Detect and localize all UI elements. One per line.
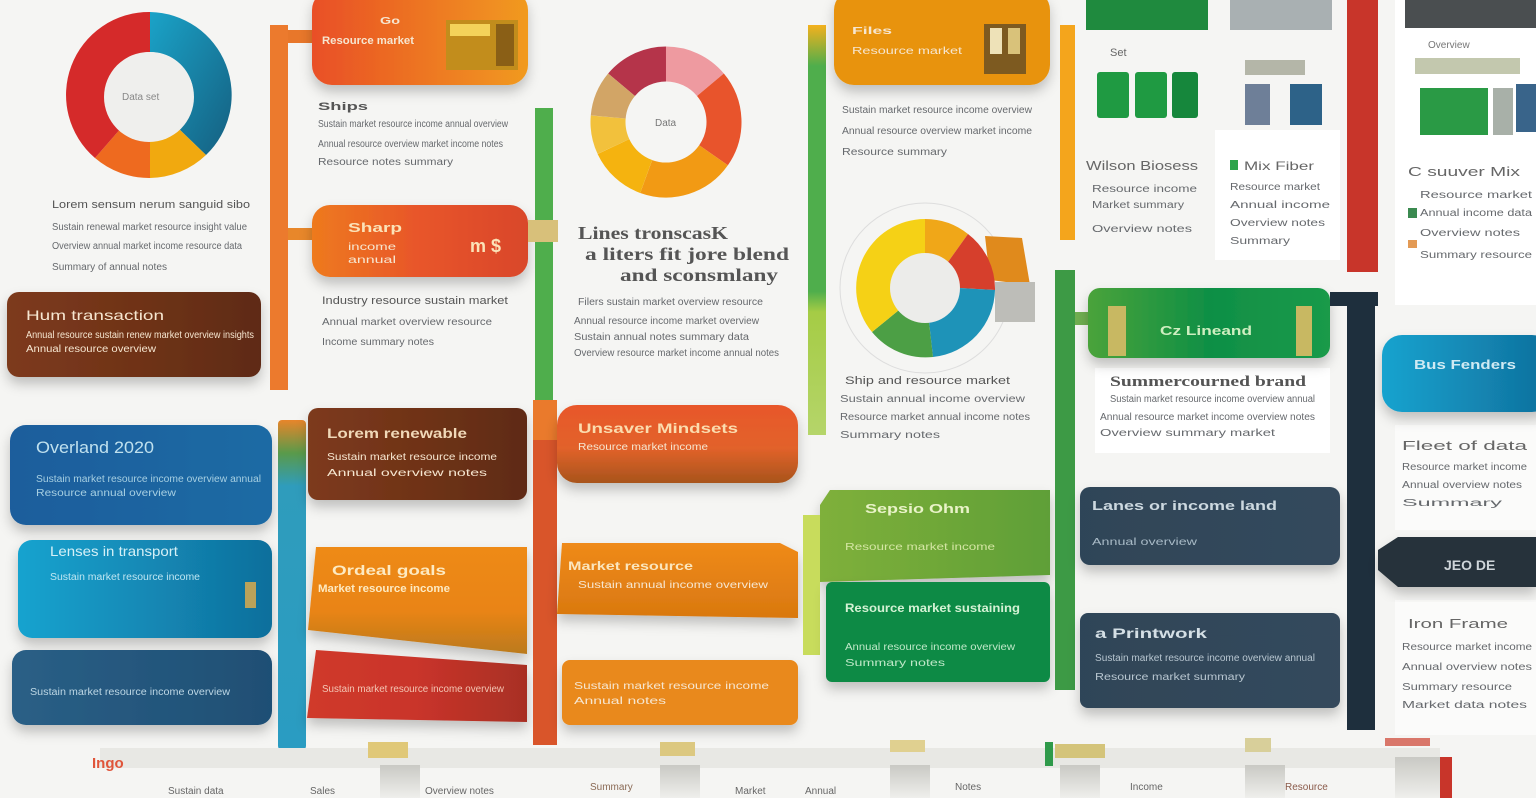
- panel: brown banner: [7, 292, 261, 377]
- text block: upper right left column: Resource income: [1092, 184, 1198, 195]
- heading: center: [578, 223, 789, 285]
- panel: orange red banner: m $: [470, 236, 501, 256]
- text block: right lower: Summary resource: [1402, 682, 1513, 693]
- text block: mid: Annual market overview resource: [322, 317, 492, 328]
- icon: green and blue tiles right: [1420, 84, 1536, 135]
- text block: right lower: Market data notes: [1402, 700, 1527, 711]
- panel: dark blue banner: Sustain market resource income overview: [30, 687, 231, 698]
- panel: brown box: Sustain market resource income: [327, 452, 498, 463]
- text block: upper right-center: [842, 105, 1033, 158]
- panel: orange slanted box: Market resource income: [318, 583, 450, 595]
- panel: orange banner: Resource market income: [578, 442, 709, 453]
- panel: blue banner: [10, 425, 272, 525]
- timeline: bottom strip: Ingo: [92, 755, 124, 772]
- text block: upper right second column: Overview notes: [1230, 218, 1325, 229]
- panel: blue banner: Overland 2020: [36, 438, 154, 457]
- text block: upper right second column: Resource market: [1230, 182, 1320, 193]
- panel: brown banner: Hum transaction: [26, 307, 164, 323]
- text block: right donut caption: Resource market annual income notes: [840, 412, 1030, 423]
- text block: mid: Income summary notes: [322, 337, 434, 348]
- icon: gold box: [446, 20, 518, 70]
- text block: right donut caption: [840, 375, 1030, 441]
- panel: top dark strip: [1405, 0, 1536, 28]
- panel: brown box: Lorem renewable: [327, 425, 467, 441]
- panel: orange header with gold box: [312, 0, 528, 85]
- panel: dark box lower: [1080, 613, 1340, 708]
- panel: dark box upper: [1080, 487, 1340, 565]
- text block: right lower: Annual overview notes: [1402, 662, 1532, 673]
- timeline: bottom strip: Income: [1130, 782, 1163, 793]
- panel: brown banner: Annual resource overview: [26, 344, 157, 355]
- panel: dark box lower: Resource market summary: [1095, 672, 1245, 683]
- heading: center: Lines tronscasK: [578, 223, 728, 243]
- panel: brown box: [308, 408, 527, 500]
- panel: blue banner right: Bus Fenders: [1414, 357, 1516, 372]
- panel: lime box: [820, 490, 1050, 582]
- text block: upper right second column: [1230, 159, 1331, 247]
- panel: dark blue banner: [12, 650, 272, 725]
- text block: center: Overview resource market income annual notes: [574, 348, 779, 359]
- text block: center: Sustain annual notes summary data: [574, 332, 749, 343]
- vertical bar: green right: [1055, 270, 1090, 690]
- text block: right list: C suuver Mix: [1408, 164, 1521, 179]
- panel: orange header right: Resource market: [852, 46, 962, 57]
- text block: right donut caption: Ship and resource market: [845, 375, 1010, 387]
- text block: right mid: Annual overview notes: [1402, 480, 1522, 491]
- text block: upper middle: Sustain market resource income annual overview: [318, 119, 509, 130]
- panel: orange header with gold box: Go: [380, 16, 400, 27]
- donut chart: left: Data set: [122, 92, 159, 103]
- text block: mid: Industry resource sustain market: [322, 295, 508, 307]
- panel: orange red banner: annual: [348, 255, 396, 266]
- panel: red box: [307, 650, 527, 722]
- timeline: bottom strip: Notes: [955, 782, 981, 793]
- text block: right list: Overview notes: [1420, 228, 1520, 239]
- panel: top green strip: [1086, 0, 1208, 30]
- heading: center: a liters fit jore blend: [585, 244, 789, 264]
- panel: dark tag right: JEO DE: [1444, 557, 1495, 573]
- panel: top grey strip: [1230, 0, 1332, 30]
- panel: lime box: Sepsio Ohm: [865, 501, 970, 516]
- panel: green box: Summary notes: [845, 658, 945, 669]
- timeline: bottom strip: Market: [735, 786, 766, 797]
- text block: left donut caption: Summary of annual notes: [52, 262, 167, 273]
- panel: red box: Sustain market resource income overview: [322, 684, 505, 695]
- text block: top right label: Overview: [1428, 40, 1470, 51]
- text block: center: Annual resource income market overview: [574, 316, 760, 327]
- text block: right lower: [1402, 616, 1533, 711]
- panel: orange header right: [834, 0, 1050, 85]
- panel: dark tag right: [1378, 537, 1536, 587]
- panel: orange slanted box: [308, 547, 527, 654]
- text block: left donut caption: Lorem sensum nerum sanguid sibo: [52, 199, 250, 211]
- text block: left donut caption: [52, 199, 250, 273]
- text block: upper middle: [318, 101, 509, 168]
- icon: tall box: [984, 24, 1026, 74]
- text block: right lower: Iron Frame: [1408, 616, 1508, 631]
- panel: orange header with gold box: Resource market: [322, 35, 414, 47]
- panel: green banner: [1088, 288, 1330, 358]
- vertical bar: green to lime: [808, 25, 826, 435]
- panel: cyan banner: Lenses in transport: [50, 543, 178, 559]
- text block: right list: Resource market: [1420, 190, 1532, 201]
- timeline: bottom strip: [92, 738, 1452, 798]
- text block: upper middle: Annual resource overview market income notes: [318, 139, 503, 150]
- panel: orange box middle: Market resource: [568, 559, 693, 573]
- donut chart: center top: Data: [655, 118, 677, 129]
- panel: orange box lower: [562, 660, 798, 725]
- icon: green tiles: Set: [1110, 47, 1127, 59]
- text block: center: Filers sustain market overview resource: [578, 297, 763, 308]
- text block: upper right left column: Overview notes: [1092, 224, 1192, 235]
- text block: top right label: [1415, 40, 1520, 74]
- text block: right donut caption: Sustain annual income overview: [840, 394, 1026, 405]
- panel: orange banner: Unsaver Mindsets: [578, 420, 738, 436]
- icon: green tiles: [1097, 47, 1198, 118]
- panel: blue banner: Sustain market resource income overview annual: [36, 474, 261, 485]
- text block: right lower: Resource market income: [1402, 642, 1533, 653]
- timeline: bottom strip: Summary: [590, 782, 633, 793]
- text block: center: [574, 297, 779, 359]
- timeline: bottom strip: Sustain data: [168, 786, 224, 797]
- icon: grey and blue tiles: [1245, 60, 1322, 125]
- panel: orange box lower: Annual notes: [574, 696, 666, 707]
- panel: dark box lower: Sustain market resource income overview annual: [1095, 653, 1315, 664]
- timeline: bottom strip: Annual: [805, 786, 836, 797]
- panel: brown banner: Annual resource sustain renew market overview insights: [26, 330, 254, 341]
- text block: upper right second column: Annual income: [1230, 200, 1331, 211]
- panel: green box: Annual resource income overview: [845, 642, 1016, 653]
- panel: orange banner: [557, 405, 798, 483]
- text block: resource heading: Sustain market resource income overview annual: [1110, 394, 1315, 405]
- heading: center: and sconsmlany: [620, 265, 778, 285]
- timeline: bottom strip: Overview notes: [425, 786, 494, 797]
- text block: left donut caption: Overview annual market income resource data: [52, 241, 242, 252]
- text block: resource heading: Summercourned brand: [1110, 374, 1307, 390]
- panel: orange box middle: Sustain annual income overview: [578, 580, 769, 591]
- vertical bar: orange connector: [270, 25, 312, 390]
- panel: dark box upper: Annual overview: [1092, 537, 1198, 548]
- panel: orange red banner: income: [348, 242, 397, 253]
- donut chart: left: [66, 12, 232, 178]
- vertical bar: cyan connector: [278, 420, 306, 750]
- panel: orange box lower: Sustain market resource income: [574, 681, 770, 692]
- vertical bar: green and orange connector: [528, 108, 558, 745]
- panel: orange slanted box: Ordeal goals: [332, 562, 446, 578]
- text block: left donut caption: Sustain renewal market resource insight value: [52, 222, 247, 233]
- panel: green box: [826, 582, 1050, 682]
- panel: lime box: Resource market income: [845, 542, 996, 553]
- donut chart: right center: [840, 203, 1035, 373]
- text block: right list: Annual income data: [1420, 208, 1533, 219]
- text block: upper right left column: Market summary: [1092, 200, 1184, 211]
- panel: dark box lower: a Printwork: [1095, 625, 1207, 641]
- text block: upper right-center: Resource summary: [842, 147, 947, 158]
- panel: orange header right: Files: [852, 26, 893, 37]
- panel: dark box upper: Lanes or income land: [1092, 498, 1277, 513]
- text block: right mid: [1402, 438, 1528, 509]
- timeline: bottom strip: Sales: [310, 786, 335, 797]
- panel: green box: Resource market sustaining: [845, 601, 1020, 615]
- text block: resource heading: [1100, 374, 1315, 439]
- text block: right mid: Summary: [1402, 498, 1502, 509]
- panel: orange box middle: [557, 543, 798, 618]
- panel: cyan banner: Sustain market resource income: [50, 572, 200, 583]
- text block: right mid: Resource market income: [1402, 462, 1527, 473]
- panel: green banner: Cz Lineand: [1160, 323, 1252, 338]
- vertical bar: red: [1347, 0, 1378, 272]
- text block: right mid: Fleet of data: [1402, 438, 1528, 453]
- panel: brown box: Annual overview notes: [327, 468, 487, 479]
- donut chart: center top: [584, 40, 748, 204]
- panel: lime side tab: [803, 515, 820, 655]
- text block: upper right left column: [1086, 158, 1199, 235]
- vertical bar: orange right: [1060, 25, 1075, 240]
- text block: upper right left column: Wilson Biosess: [1086, 158, 1199, 173]
- panel: cyan banner: [18, 540, 272, 638]
- panel: blue banner: Resource annual overview: [36, 488, 177, 499]
- timeline: bottom strip: Resource: [1285, 782, 1328, 793]
- text block: upper middle: Ships: [318, 101, 368, 113]
- text block: resource heading: Annual resource market income overview notes: [1100, 412, 1315, 423]
- text block: right list: Summary resource: [1420, 250, 1533, 261]
- text block: upper right second column: Summary: [1230, 236, 1290, 247]
- text block: right list: [1408, 164, 1533, 261]
- panel: orange red banner: [312, 205, 528, 277]
- text block: right donut caption: Summary notes: [840, 430, 940, 441]
- panel: orange red banner: Sharp: [348, 220, 402, 235]
- text block: mid: [322, 295, 508, 348]
- vertical bar: dark: [1330, 292, 1378, 730]
- text block: upper middle: Resource notes summary: [318, 157, 453, 168]
- text block: upper right-center: Sustain market resource income overview: [842, 105, 1033, 116]
- text block: resource heading: Overview summary market: [1100, 428, 1275, 439]
- text block: upper right second column: Mix Fiber: [1244, 159, 1314, 173]
- text block: upper right-center: Annual resource overview market income: [842, 126, 1032, 137]
- panel: blue banner right: [1382, 335, 1536, 412]
